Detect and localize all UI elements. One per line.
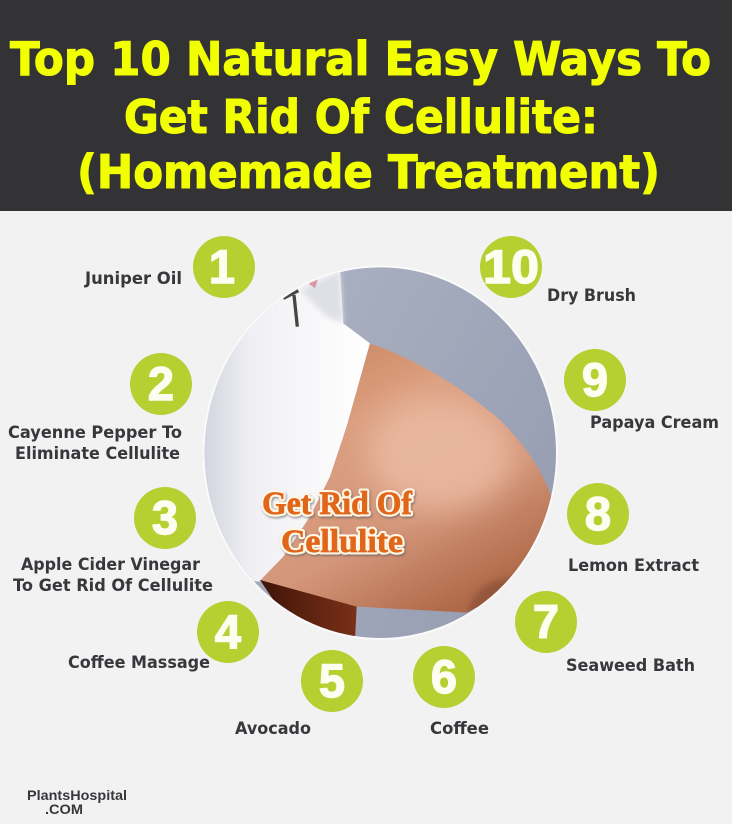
- title text: Top 10 Natural Easy Ways To: [10, 32, 711, 86]
- item 8: Lemon Extract: [568, 556, 699, 575]
- watermark: PlantsHospital: [27, 787, 127, 803]
- photo: waistband shading: [300, 270, 343, 323]
- item 8: 8: [585, 487, 611, 540]
- item 10: 10: [483, 240, 539, 293]
- item 3: Apple Cider Vinegar: [21, 555, 201, 574]
- centre caption: Cellulite: [281, 524, 403, 560]
- item 5: Avocado: [235, 719, 311, 738]
- item 3: [13, 487, 213, 595]
- item 5: 5: [319, 654, 345, 707]
- photo: skin: [260, 343, 567, 613]
- item 6: [413, 646, 489, 738]
- item 9: Papaya Cream: [590, 413, 719, 432]
- item 6: 6: [431, 650, 457, 703]
- item 4: [68, 601, 259, 672]
- item 10: Dry Brush: [547, 286, 636, 305]
- photo: skin shading: [367, 397, 533, 627]
- title text: [10, 32, 711, 199]
- item 6: Coffee: [430, 719, 489, 738]
- centre caption: [262, 486, 413, 560]
- item 3: To Get Rid Of Cellulite: [13, 576, 213, 595]
- item 7: Seaweed Bath: [566, 656, 695, 675]
- photo: zipper: [283, 291, 298, 327]
- watermark: [27, 787, 127, 817]
- photo: under-thigh crease: [260, 580, 357, 640]
- item 9: 9: [582, 353, 608, 406]
- title banner: [0, 0, 732, 211]
- central photo circle: [200, 260, 567, 653]
- item 8: [567, 483, 699, 575]
- item 2: Eliminate Cellulite: [15, 444, 180, 463]
- item 7: 7: [533, 595, 559, 648]
- item 3: 3: [152, 491, 178, 544]
- item 5: [235, 650, 363, 738]
- title text: (Homemade Treatment): [77, 145, 660, 199]
- item 1: 1: [209, 240, 235, 293]
- item 4: Coffee Massage: [68, 653, 210, 672]
- item 9: [564, 349, 719, 432]
- item 10: [480, 236, 636, 305]
- item 1: [84, 236, 255, 298]
- item 7: [515, 591, 695, 675]
- watermark: .COM: [45, 801, 83, 817]
- item 4: 4: [215, 605, 241, 658]
- centre caption: Cellulite: [281, 524, 403, 560]
- photo: grey wall: [200, 260, 567, 653]
- photo: white shorts: [200, 270, 370, 582]
- title text: Get Rid Of Cellulite:: [124, 90, 598, 144]
- photo: tag: [308, 280, 318, 288]
- item 2: Cayenne Pepper To: [8, 423, 182, 442]
- centre caption: Get Rid Of: [262, 486, 413, 522]
- item 2: [8, 353, 192, 463]
- item 2: 2: [148, 357, 174, 410]
- centre caption: Get Rid Of: [262, 486, 413, 522]
- item 1: Juniper Oil: [84, 269, 182, 288]
